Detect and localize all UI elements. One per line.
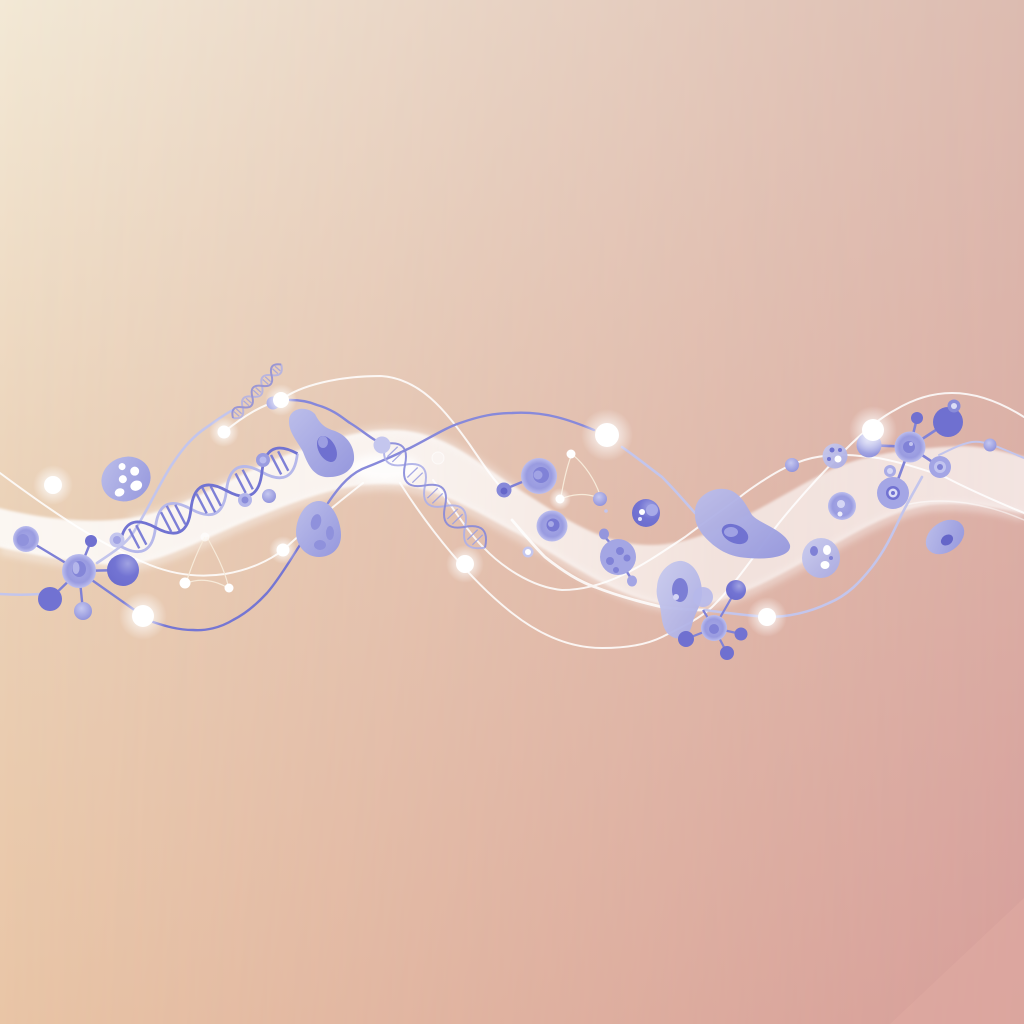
small molecules near helix — [238, 396, 390, 507]
DNA helix: top small — [229, 361, 285, 422]
white flowing ribbon — [0, 430, 1024, 608]
cell: dark sphere with highlights — [632, 499, 660, 527]
cell: right small oval — [919, 513, 971, 561]
cells: right — [785, 438, 996, 578]
periwinkle flowing lines — [153, 400, 594, 630]
white flowing lines — [0, 376, 1024, 648]
cells: center — [496, 458, 608, 558]
DNA helix: main — [113, 440, 304, 559]
cell: spotted blob — [296, 501, 341, 557]
glowing nodes — [33, 384, 897, 640]
thin network: left — [180, 532, 234, 592]
molecule: lower center — [678, 580, 748, 660]
cell: pale lower blob — [657, 561, 713, 639]
cell: large blob — [695, 489, 790, 558]
cell: top blob — [289, 409, 354, 477]
molecule: left — [13, 526, 143, 620]
cell: spotted sphere with buds — [599, 528, 637, 586]
DNA helix: middle — [377, 436, 493, 555]
pale lavender flowing lines — [0, 410, 1024, 617]
molecule: upper right — [856, 400, 963, 509]
cell: spotted oval — [95, 449, 157, 509]
thin network: center — [561, 450, 600, 499]
